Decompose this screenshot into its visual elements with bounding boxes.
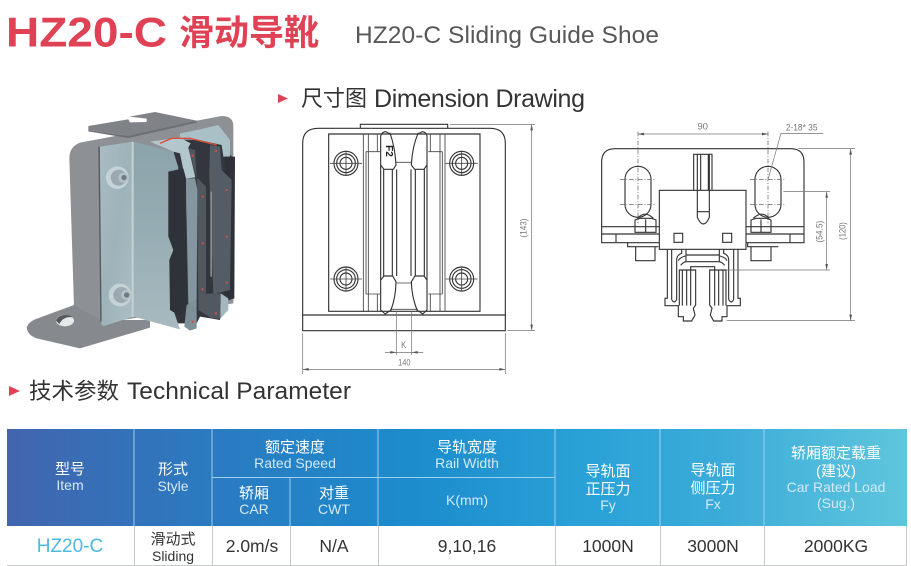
column: car rated load: (建议) <box>816 463 856 480</box>
heading: technical parameter <box>9 378 351 405</box>
data row: 3000N <box>687 536 739 556</box>
black liner <box>168 168 187 316</box>
mounting plate <box>329 134 480 311</box>
column: car rated load <box>787 445 885 511</box>
column: cwt <box>318 485 350 517</box>
dimension drawing: front view: 140 <box>398 357 410 367</box>
parameter table <box>7 429 907 566</box>
lower ends <box>198 293 221 318</box>
red marks <box>191 150 228 323</box>
dimension drawing: side view: (120) <box>838 222 848 240</box>
product photo: sliding guide shoe <box>27 112 235 348</box>
bolts <box>334 151 474 291</box>
dimension drawing: side view: 90 <box>697 121 708 131</box>
column: fx: 侧压力 <box>690 480 736 497</box>
data row: HZ20-C <box>37 536 103 557</box>
title: HZ20-C <box>6 8 167 56</box>
data row <box>37 531 868 564</box>
data row: N/A <box>319 536 349 556</box>
oblong slots <box>625 166 651 217</box>
left guide liner <box>381 132 397 314</box>
galvanised plate <box>100 142 133 326</box>
column: item: 型号 <box>55 461 85 478</box>
column: rail width: Rail Width <box>435 455 499 471</box>
rear galvanised strips <box>180 125 230 157</box>
dark interior <box>173 140 233 323</box>
data row: 滑动式 <box>150 531 196 548</box>
data row: 2.0m/s <box>226 536 279 556</box>
dimension drawing: side view: 2-18* 35 <box>786 123 817 133</box>
column: fy: Fy <box>600 497 616 513</box>
heading: dimension drawing <box>278 85 585 113</box>
heading: dimension drawing: Dimension Drawing <box>374 85 585 113</box>
column: car: 轿厢 <box>239 485 269 502</box>
foot <box>27 305 150 348</box>
top plate <box>88 112 197 136</box>
heading: technical parameter: Technical Parameter <box>127 378 351 405</box>
dimension drawing: side view <box>602 121 855 321</box>
data row: 9,10,16 <box>438 536 496 556</box>
bolts <box>106 166 129 189</box>
column: rated speed: Rated Speed <box>254 455 336 471</box>
guide rail clamps <box>665 249 740 321</box>
column: style <box>157 461 189 494</box>
column: fx <box>690 462 736 512</box>
central body and slot <box>659 190 746 249</box>
column: fy: 导轨面 <box>585 463 631 480</box>
subtitle: HZ20-C Sliding Guide Shoe <box>355 22 659 49</box>
centre rail <box>188 148 206 300</box>
base plate outline <box>303 124 505 331</box>
column: rated speed: 额定速度 <box>265 439 325 456</box>
data row: Sliding <box>152 548 194 564</box>
column: rail width: 导轨宽度 <box>437 439 497 456</box>
column: fx: 导轨面 <box>690 462 736 479</box>
column: car rated load: 轿厢额定载重 <box>791 445 881 462</box>
column: rated speed <box>254 439 336 471</box>
column: fx: Fx <box>705 496 721 512</box>
column: car: CAR <box>239 501 269 517</box>
column: item: Item <box>56 477 84 493</box>
heading: technical parameter: 技术参数 <box>29 379 119 404</box>
dimension drawing: side view: (54.5) <box>814 221 824 243</box>
back plate <box>69 116 233 323</box>
title <box>6 8 319 56</box>
column: style: 形式 <box>158 461 188 478</box>
column: fy: 正压力 <box>585 481 631 498</box>
column: style: Style <box>157 478 189 494</box>
base plate outline <box>602 149 804 243</box>
column: fy <box>585 463 631 513</box>
data row: 2000KG <box>804 536 868 556</box>
table header background <box>7 429 907 526</box>
title: 滑动导靴 <box>179 14 319 53</box>
dimension drawing: front view <box>303 124 535 374</box>
dimension drawing: front view: (143) <box>518 218 528 237</box>
heading: dimension drawing: 尺寸图 <box>301 86 367 111</box>
bolts and nuts <box>628 214 658 261</box>
column: item <box>55 461 85 493</box>
column: cwt: CWT <box>318 501 350 517</box>
column: rail width: K(mm) <box>446 492 488 508</box>
column: car <box>239 485 269 517</box>
column: car rated load: (Sug.) <box>817 495 855 511</box>
table body grid <box>7 526 907 566</box>
right guide liner <box>411 132 427 314</box>
column: car rated load: Car Rated Load <box>787 479 885 495</box>
right black liner <box>224 157 235 302</box>
dimensions <box>303 124 535 374</box>
data row: 1000N <box>582 536 634 556</box>
right rail <box>209 145 232 294</box>
dimensions <box>638 133 855 321</box>
column: cwt: 对重 <box>319 485 349 502</box>
dimension drawing: front view: K <box>401 340 406 350</box>
liner marking: F2 <box>383 145 394 157</box>
column: rail width <box>435 439 499 508</box>
